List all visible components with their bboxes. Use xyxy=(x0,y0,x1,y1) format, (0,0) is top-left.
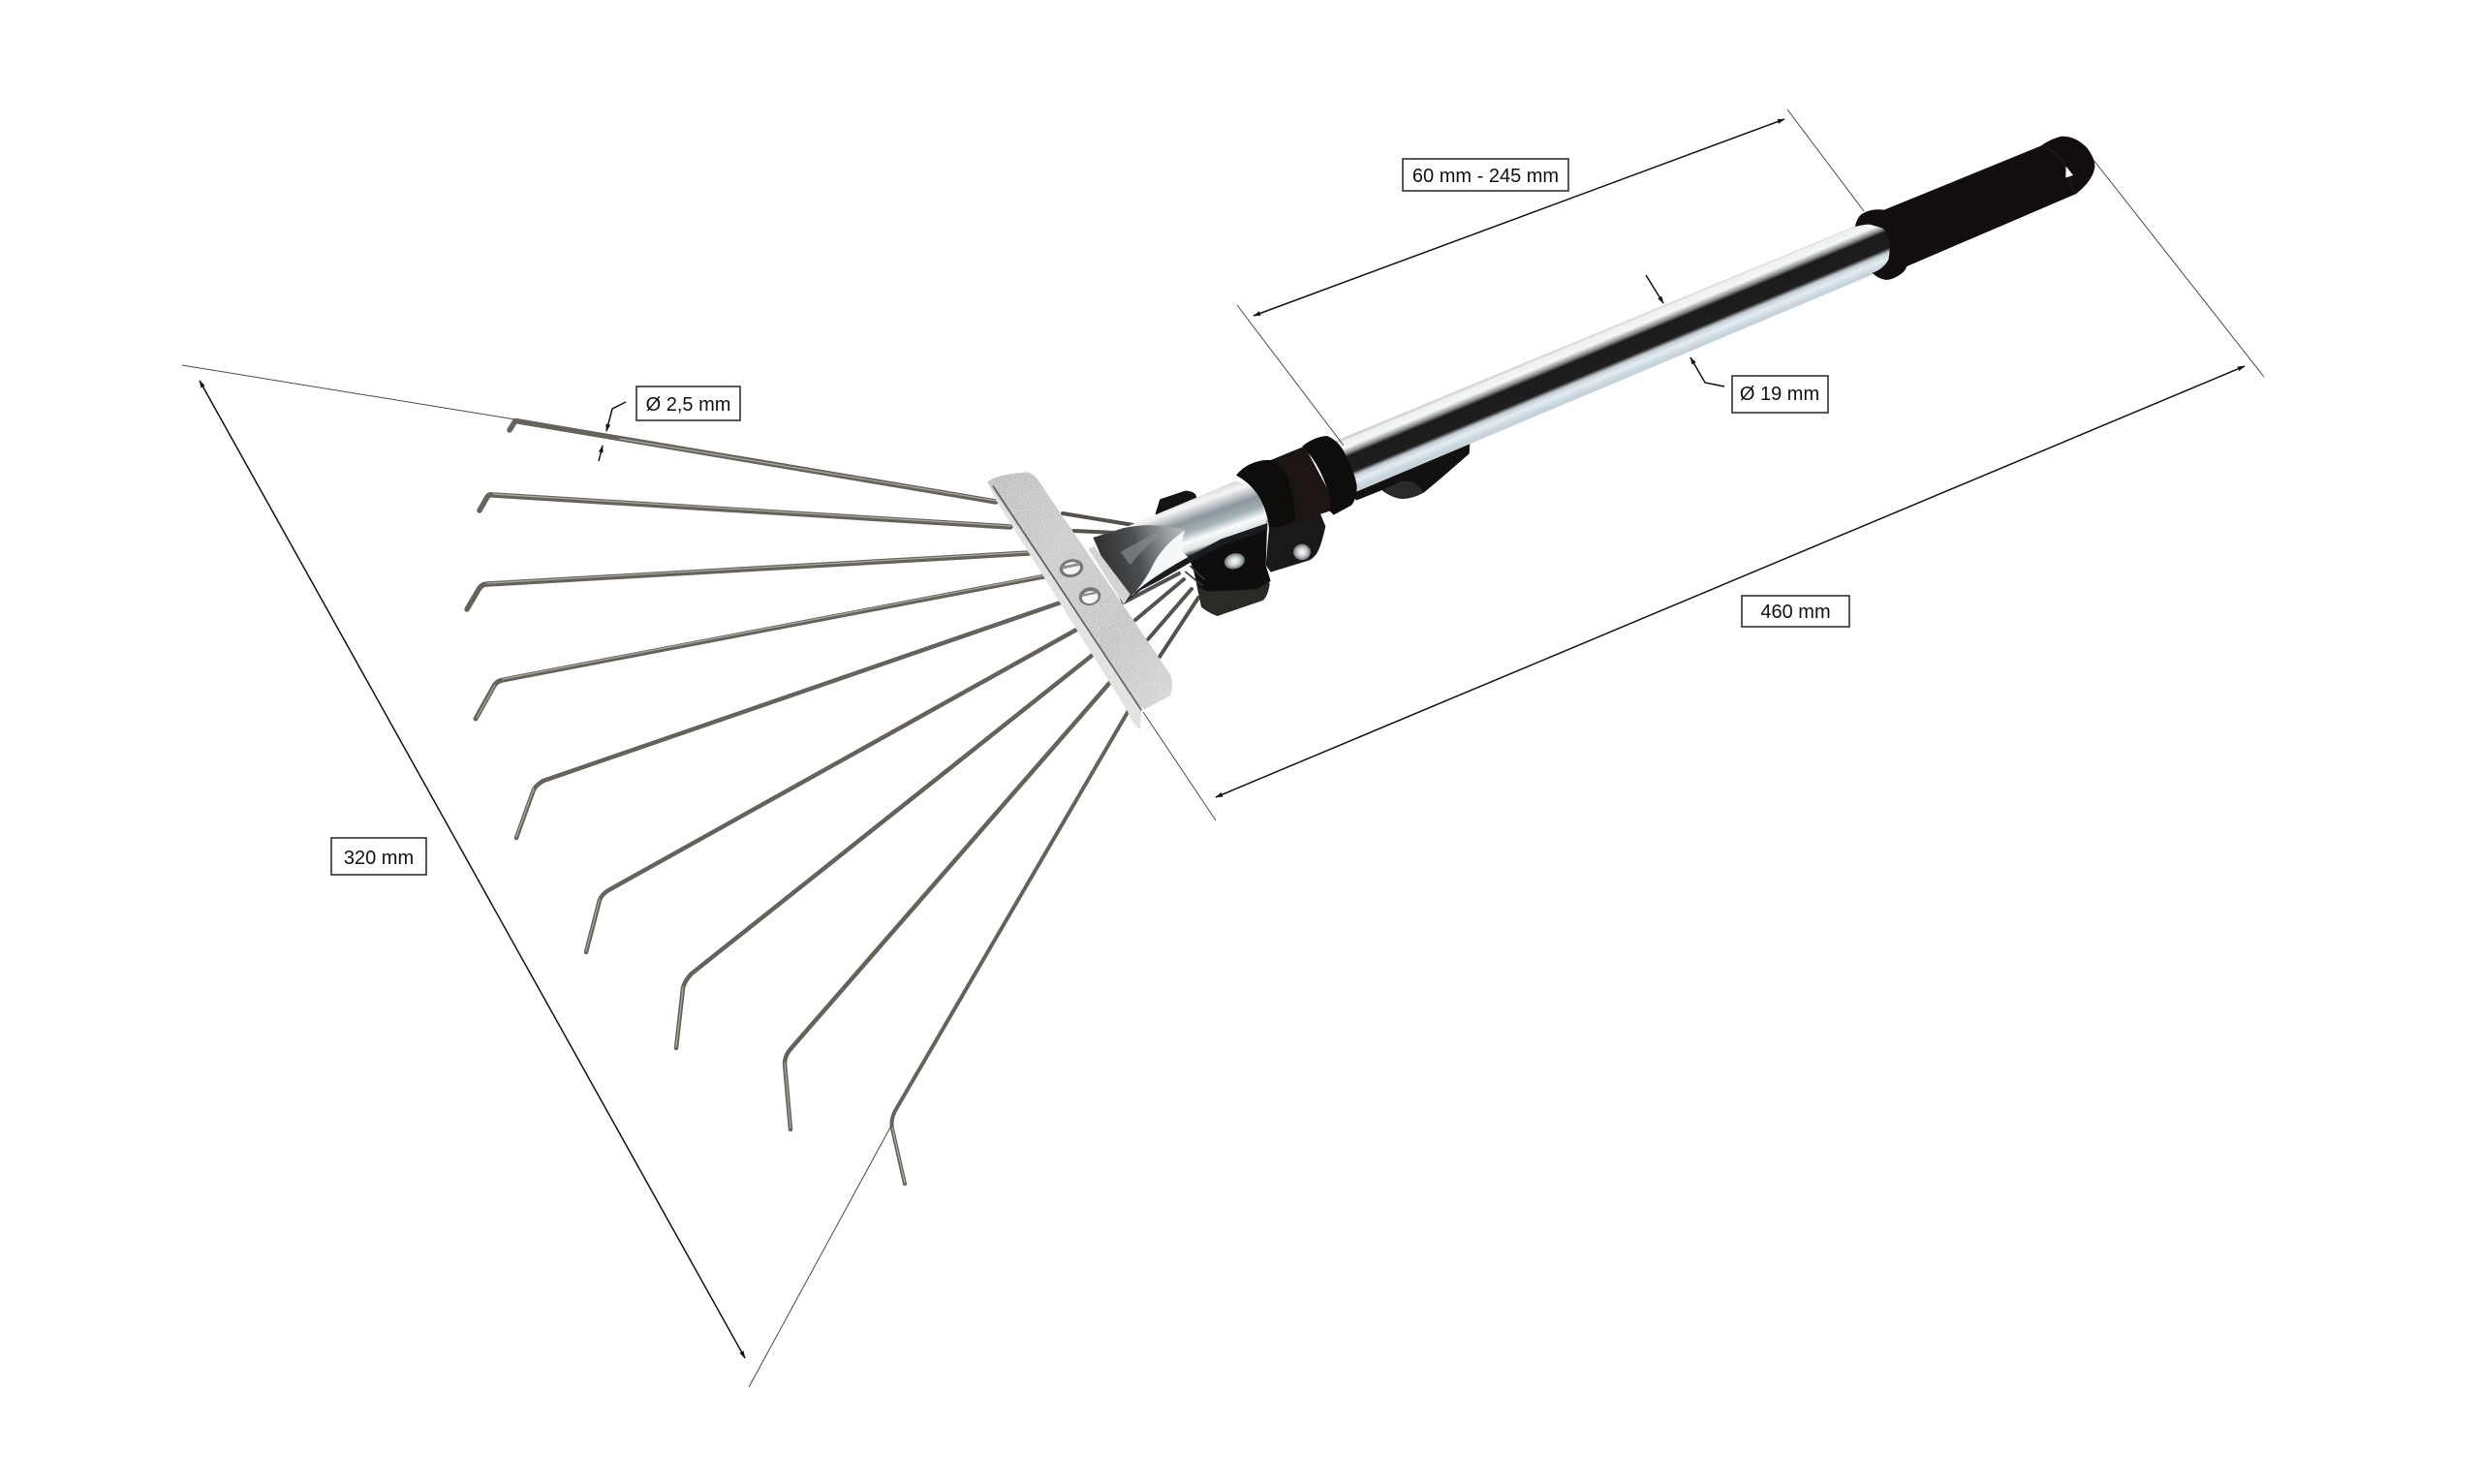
flared metal neck xyxy=(1093,481,1267,603)
label: 460 mm: 460 mm xyxy=(1760,602,1831,623)
clamp collar with bolts xyxy=(1223,436,1357,572)
tine 6 xyxy=(586,629,1078,952)
label: 320 mm xyxy=(331,838,426,875)
plate face xyxy=(987,472,1172,709)
tine 7 xyxy=(676,655,1093,1048)
collar middle xyxy=(1271,447,1332,522)
plate rear lip xyxy=(1088,546,1131,604)
lower lock housing xyxy=(1185,520,1271,616)
clamp front plate xyxy=(1266,507,1325,572)
tine 9 xyxy=(891,707,1131,1184)
tine 3 xyxy=(467,552,1029,609)
tine 5 xyxy=(516,603,1061,838)
label: 460 mm xyxy=(1742,596,1849,627)
dimension: tine span 320 mm xyxy=(182,365,891,1387)
collar ring left xyxy=(1236,460,1295,528)
screw hole xyxy=(1077,585,1102,607)
icon: rake lever behind the shaft xyxy=(1349,443,1470,501)
tine 8 xyxy=(785,680,1112,1129)
collar ring right xyxy=(1302,436,1357,515)
hanging hole xyxy=(2065,167,2073,177)
shaft tube xyxy=(1318,214,1904,498)
screw hole xyxy=(1058,557,1085,579)
dimension: telescopic range 60 mm - 245 mm xyxy=(1237,109,1864,446)
tine 4 xyxy=(476,575,1044,719)
rear tine ends behind the plate xyxy=(1063,513,1198,657)
tine 2 xyxy=(480,494,1010,527)
tine 1 xyxy=(510,421,996,502)
label: diameter 2,5 mm xyxy=(636,386,740,420)
icon: rear tab behind the neck xyxy=(1156,491,1198,516)
label: diameter 19 mm: Ø 19 mm xyxy=(1740,384,1819,405)
label: 60 mm - 245 mm: 60 mm - 245 mm xyxy=(1412,166,1559,187)
bolt xyxy=(1223,551,1247,572)
label: 320 mm: 320 mm xyxy=(344,848,414,869)
rake plate with screws xyxy=(987,472,1172,729)
label: diameter 19 mm xyxy=(1732,376,1828,413)
plate flange xyxy=(987,482,1141,729)
handle grip xyxy=(1855,137,2094,280)
bolt xyxy=(1293,544,1311,560)
tines xyxy=(467,421,1131,1184)
dimension: wire diameter 2,5 mm xyxy=(599,386,740,461)
label: diameter 2,5 mm: Ø 2,5 mm xyxy=(646,394,730,416)
dimension: shaft diameter 19 mm xyxy=(1646,275,1828,413)
label: 60 mm - 245 mm xyxy=(1403,159,1568,191)
dimension: handle length 460 mm xyxy=(1143,160,2264,820)
